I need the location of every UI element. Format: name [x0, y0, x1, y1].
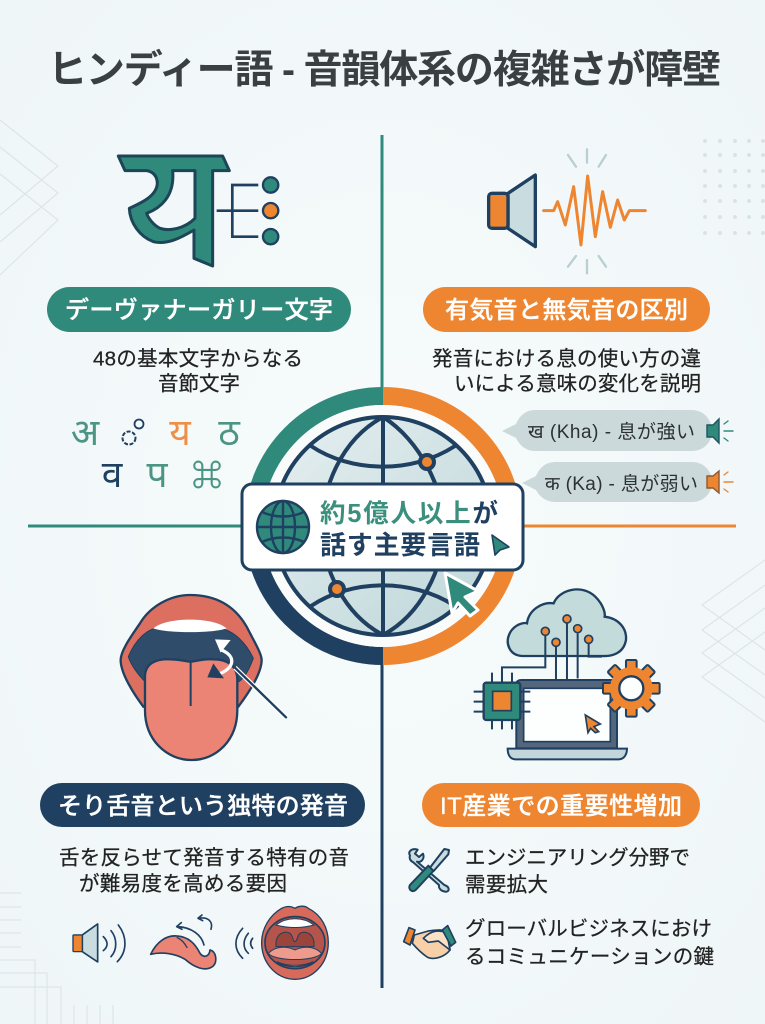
callout: 500 million speakers — [242, 484, 523, 570]
icon: handshake — [404, 926, 456, 958]
heading pill: aspirated — [423, 287, 710, 332]
heading pill: retroflex — [40, 783, 365, 827]
text block: devanagari description: 48の基本文字からなる — [93, 348, 303, 370]
text block: engineering demand: 需要拡大 — [465, 874, 548, 896]
heading pill: IT — [422, 783, 700, 827]
heading pill: aspirated: 有気音と無気音の区別 — [445, 297, 688, 324]
icon: small globe — [257, 501, 309, 553]
text block: global business — [465, 918, 714, 968]
panel: aspirated sounds — [423, 149, 733, 502]
text block: aspirated description: 発音における息の使い方の違 — [432, 348, 701, 370]
speech bubble: ka: क (Ka) - 息が弱い — [545, 473, 698, 495]
speech bubble: kha — [502, 410, 712, 451]
sample characters — [71, 412, 241, 495]
heading pill: devanagari: デーヴァナーガリー文字 — [65, 296, 333, 324]
icon: wrench and screwdriver — [409, 849, 449, 892]
illustration: cloud, chip, laptop and gear — [474, 589, 660, 759]
sample characters: प — [146, 454, 168, 495]
icon: sound arcs — [236, 928, 253, 958]
icon: small speaker — [73, 924, 125, 962]
sample characters: ⌘ — [192, 460, 222, 493]
text block: engineering demand: エンジニアリング分野で — [465, 846, 690, 870]
callout: 500 million speakers: 約5億人以上が — [320, 499, 498, 528]
icon: open mouth — [262, 906, 328, 979]
heading pill: devanagari — [47, 287, 351, 332]
icon: teal speaker — [707, 419, 733, 443]
text block: global business: るコミュニケーションの鍵 — [465, 946, 714, 968]
icon: devanagari letter with branches — [118, 156, 278, 266]
panel: IT industry — [404, 589, 714, 968]
panel: devanagari script — [47, 156, 351, 495]
speech bubble: ka — [522, 462, 712, 502]
heading pill: retroflex: そり舌音という独特の発音 — [58, 793, 348, 820]
sample characters: य — [169, 412, 191, 453]
globe — [274, 417, 492, 635]
icon: large cursor — [445, 573, 478, 616]
icon: orange speaker — [707, 471, 733, 493]
text block: engineering demand — [465, 846, 690, 896]
icon: speaker and sound wave — [489, 149, 645, 273]
heading pill: IT: IT産業での重要性増加 — [440, 793, 682, 820]
speech bubble: kha: ख (Kha) - 息が強い — [528, 421, 695, 443]
text block: retroflex description — [59, 846, 349, 896]
sample characters: अ — [71, 412, 100, 453]
illustration: mouth and tongue — [121, 595, 286, 760]
icon: curling tongue — [151, 915, 216, 969]
icon: small cursor — [492, 535, 509, 555]
text block: devanagari description — [93, 348, 303, 396]
text block: retroflex description: が難易度を高める要因 — [79, 872, 287, 896]
center: globe with ring — [242, 396, 523, 656]
panel: retroflex sounds — [40, 595, 365, 979]
text block: retroflex description: 舌を反らせて発音する特有の音 — [59, 846, 349, 870]
text block: aspirated description: いによる意味の変化を説明 — [454, 372, 701, 396]
text block: aspirated description — [432, 348, 701, 396]
title: ヒンディー語 - 音韻体系の複雑さが障壁 — [48, 48, 721, 92]
ring quadrants — [253, 396, 513, 656]
sample characters: व — [102, 454, 124, 495]
callout: 500 million speakers: 話す主要言語 — [320, 530, 480, 560]
sample characters: ठ — [218, 412, 241, 453]
text block: global business: グローバルビジネスにおけ — [465, 918, 712, 940]
text block: devanagari description: 音節文字 — [158, 372, 240, 396]
